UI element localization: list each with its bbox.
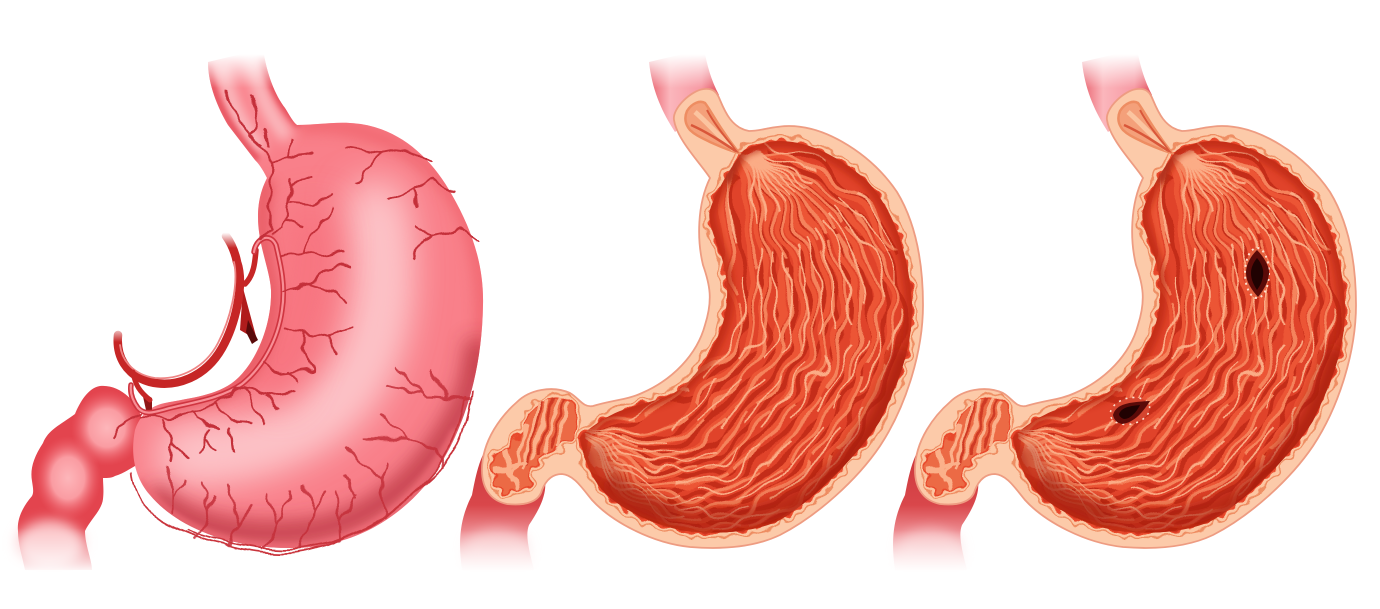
stomach wall and folds <box>482 89 923 548</box>
ulcer: upper body <box>1245 248 1269 298</box>
stomach 2: healthy cross-section <box>442 40 923 590</box>
stomach wall and folds <box>915 89 1356 548</box>
duodenum <box>875 440 985 590</box>
ulcer: antrum <box>1107 394 1153 428</box>
oesophagus <box>1070 40 1152 132</box>
oesophagus fade <box>196 40 280 88</box>
gastric vessel along lesser curvature <box>131 238 283 413</box>
vessel net around greater curvature <box>132 390 472 554</box>
duodenum <box>442 440 552 590</box>
duodenum tube <box>0 386 143 590</box>
stomach body <box>133 49 483 548</box>
stomach 3: cross-section with ulcers <box>875 40 1356 590</box>
oesophagus <box>637 40 719 132</box>
arterial wedges <box>142 288 258 412</box>
branching blood vessels <box>112 90 478 548</box>
stomach 1: exterior view with blood vessels <box>0 40 483 590</box>
hepatic artery arc <box>108 226 256 400</box>
